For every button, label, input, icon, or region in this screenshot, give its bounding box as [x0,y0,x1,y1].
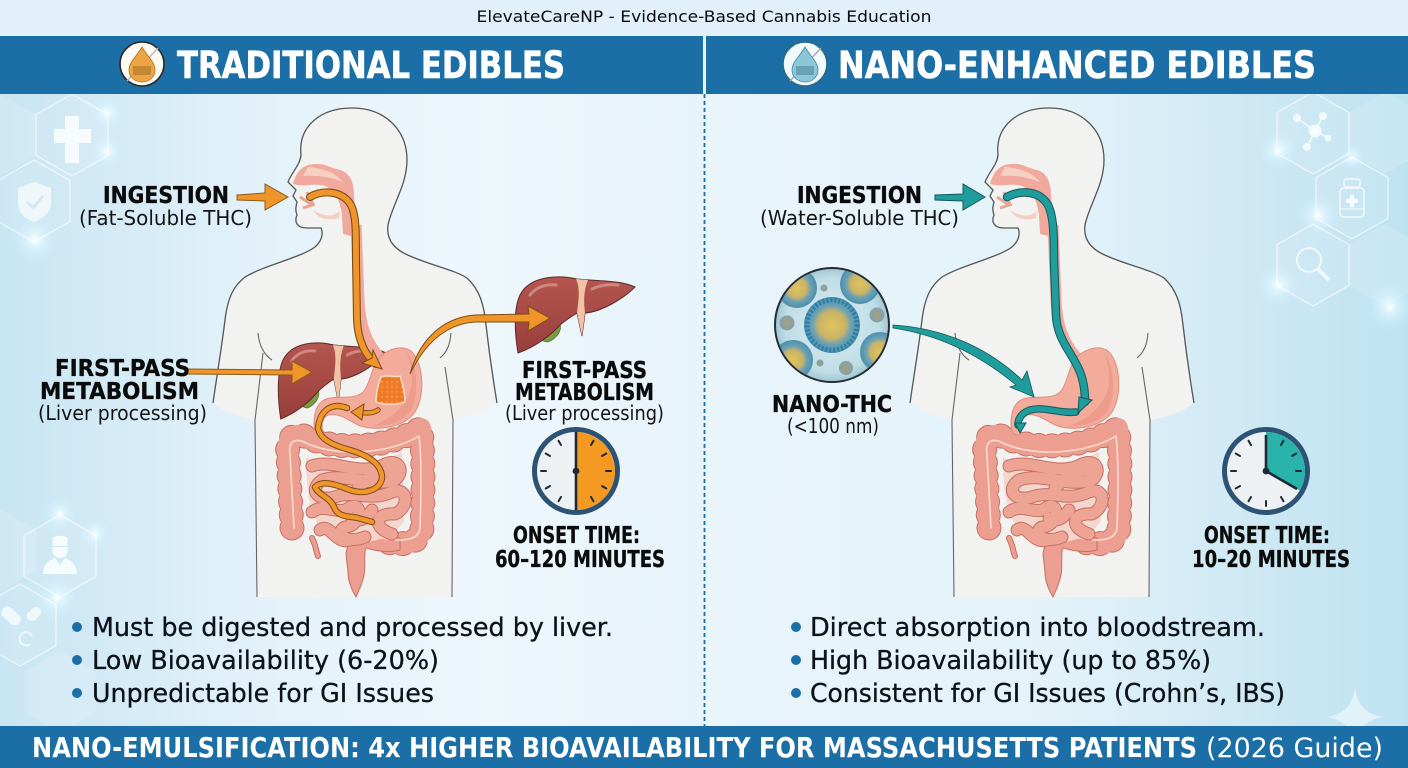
bullet list, traditional: Low Bioavailability (6-20%) [92,646,439,676]
panel header: nano-enhanced edibles [706,36,1408,94]
central divider [704,94,706,726]
clock: 60-120 minutes [534,430,618,512]
bullet list, nano [791,613,1285,709]
small liver [278,343,386,419]
label: ingestion, nano: INGESTION [797,183,922,209]
onset time label, traditional: 60–120 MINUTES [495,547,665,573]
label: ingestion, nano: (Water-Soluble THC) [760,206,959,230]
label: nano-thc [772,392,892,438]
label: first-pass metabolism, left [38,356,207,425]
label: first-pass metabolism, left: FIRST-PASS [55,356,190,382]
gummy in stomach [376,376,405,404]
bullet list, traditional [72,613,613,709]
label: first-pass metabolism, right of figure [505,358,664,425]
body diagram: nano-enhanced [910,108,1194,597]
onset time label, traditional [495,523,665,573]
icon: oil drop [120,42,164,86]
bullet list, traditional: Must be digested and processed by liver. [92,613,613,643]
large liver [515,277,635,353]
icon: sparkle [1327,688,1383,746]
arrow: first-pass to liver [186,361,312,384]
arrow: ingestion, teal [935,184,985,210]
bullet list, traditional: Unpredictable for GI Issues [92,679,434,709]
label: nano-thc: (<100 nm) [787,414,879,438]
label: nano-thc: NANO-THC [772,392,892,418]
label: ingestion, traditional [79,183,252,230]
icon: water drop [783,42,827,86]
label: first-pass metabolism, left: METABOLISM [40,379,199,405]
body diagram: traditional [213,108,497,597]
label: first-pass metabolism, left: (Liver processing) [38,401,207,425]
bullet list, nano: High Bioavailability (up to 85%) [810,646,1211,676]
arrow: orange path through GI tract [310,192,382,522]
label: first-pass metabolism, right of figure: METABOLISM [515,380,654,406]
label: first-pass metabolism, right of figure: FIRST-PASS [522,358,647,384]
label: ingestion, traditional: INGESTION [103,183,229,209]
arrow: ingestion, orange [237,184,288,210]
heading: NANO-ENHANCED EDIBLES [838,44,1316,87]
label: ingestion, traditional: (Fat-Soluble THC) [79,206,252,230]
label: first-pass metabolism, right of figure: (Liver processing) [505,401,664,425]
onset time label, traditional: ONSET TIME: [513,523,640,549]
onset time label, nano [1192,523,1350,573]
arrow: nano-thc to stomach [893,325,1034,397]
nano-particle circle [774,267,890,383]
panel header: traditional edibles [0,36,703,94]
top title: ElevateCareNP - Evidence-Based Cannabis Education [476,7,932,26]
footer banner: (2026 Guide) [1206,733,1383,764]
onset time label, nano: 10–20 MINUTES [1192,547,1350,573]
decorative hexagon icons, right [1277,92,1408,306]
arrow: teal path through GI tract [1007,192,1085,425]
footer banner: NANO-EMULSIFICATION: 4x HIGHER BIOAVAILABILITY FOR MASSACHUSETTS PATIENTS [32,731,1197,764]
bullet list, nano: Consistent for GI Issues (Crohn’s, IBS) [810,679,1285,709]
decorative hexagon icons, left [0,94,108,733]
clock: 10-20 minutes [1224,430,1308,512]
bullet list, nano: Direct absorption into bloodstream. [810,613,1265,643]
arrow: stomach to large liver [410,306,550,374]
label: ingestion, nano [760,183,959,230]
onset time label, nano: ONSET TIME: [1204,523,1330,549]
heading: TRADITIONAL EDIBLES [177,44,565,87]
